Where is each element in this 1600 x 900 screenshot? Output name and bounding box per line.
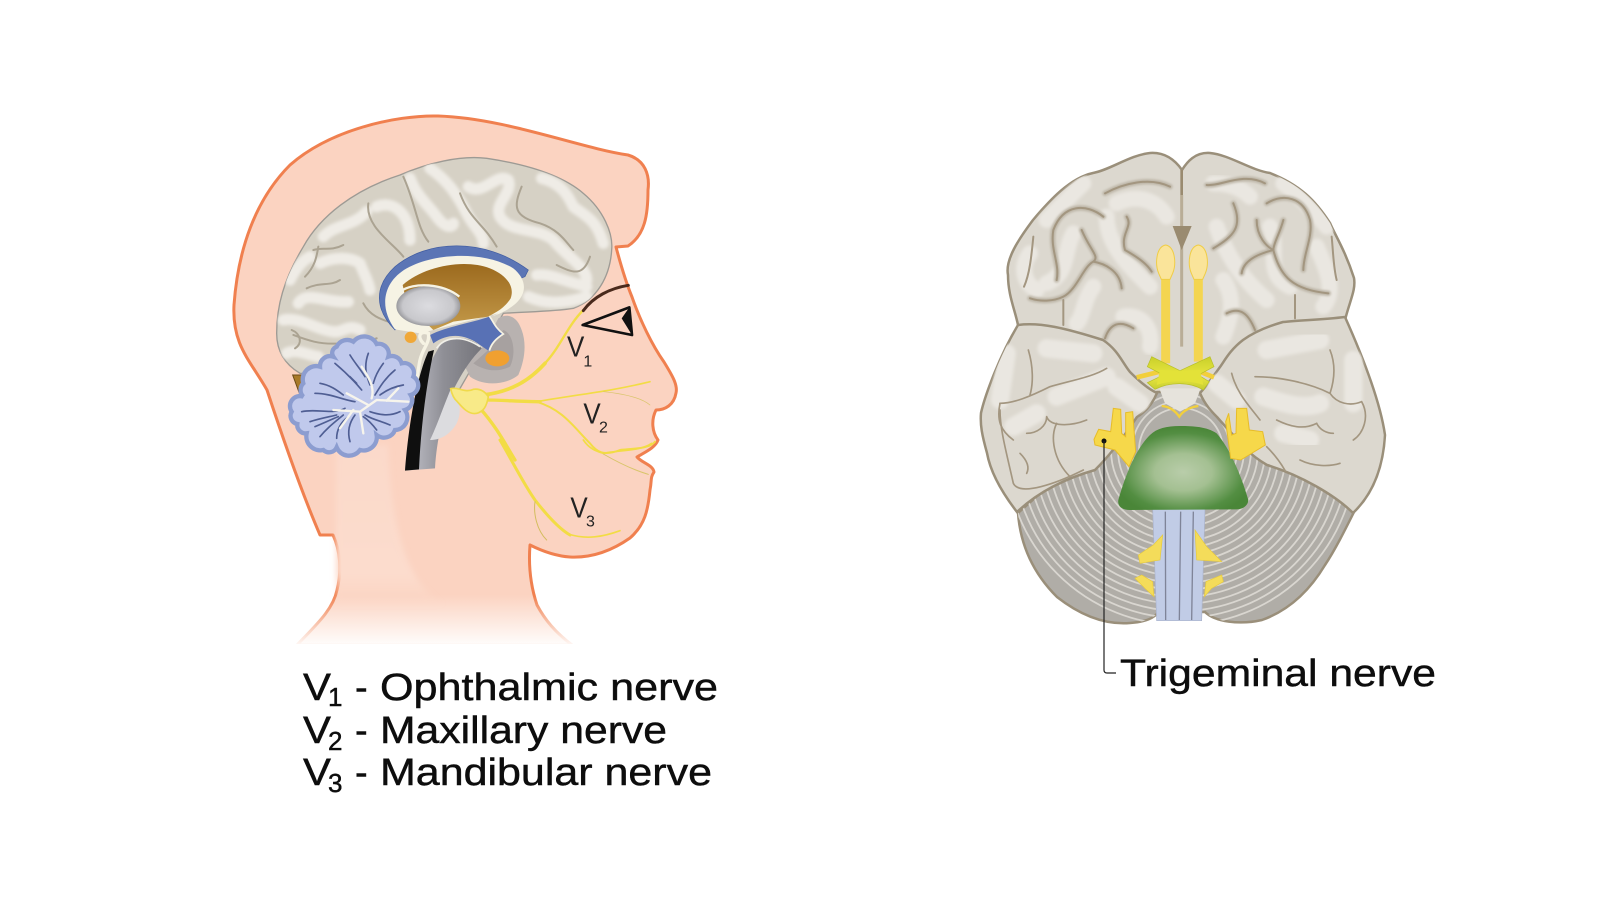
optic nerves orange [1137, 372, 1214, 377]
olfactory bulb left [1157, 245, 1175, 279]
neck highlight [336, 445, 460, 610]
chiasm body [1157, 370, 1203, 385]
olfactory tract right [1185, 273, 1212, 362]
head silhouette [234, 116, 676, 645]
brown tentorium [293, 375, 323, 395]
legend line V1: V [303, 667, 332, 709]
frontal sulci [1024, 179, 1337, 338]
thalamus [396, 286, 460, 326]
cerebellum dark folia [302, 353, 403, 442]
eye [583, 307, 632, 335]
medulla stripes [1165, 512, 1193, 620]
pons [1118, 426, 1248, 510]
label V1: V [567, 332, 584, 364]
legend line V1: - [355, 667, 368, 709]
medulla [1153, 508, 1205, 621]
legend line V2: 2 [328, 726, 342, 756]
fissure wedge [1173, 226, 1192, 250]
legend line V3: 3 [328, 768, 342, 798]
panel: head profile with nerves [234, 116, 676, 652]
brown interior [403, 264, 512, 330]
orange pineal [405, 332, 417, 343]
frontal sulci halo [1030, 179, 1328, 338]
V3 nerve [480, 408, 515, 460]
label V1 subscript: 1 [583, 354, 592, 371]
white edge of ventricle [489, 316, 503, 351]
third ventricle blue [430, 317, 503, 351]
leader dot [1102, 438, 1106, 444]
leader line [1104, 441, 1116, 673]
white aqueduct edge [408, 332, 429, 402]
trigeminal nerve root right [1226, 408, 1265, 460]
brainstem [405, 338, 482, 471]
temporal lower sulci [1000, 410, 1340, 497]
cerebellum folia rings [1018, 392, 1347, 622]
optic chiasm [1147, 357, 1214, 390]
corpus callosum blue [379, 246, 528, 330]
cerebrum gyri light folds [283, 168, 603, 357]
legend line V2: - [355, 710, 368, 752]
legend: V1 V2 V3 nerve names [303, 667, 718, 798]
olfactory bulb right [1189, 245, 1207, 279]
frontal light folds [1024, 183, 1330, 347]
lobe inner shade [473, 330, 513, 370]
panel: inferior view of brain [981, 153, 1385, 625]
cerebrum [277, 158, 612, 400]
legend line V3: - [355, 752, 368, 794]
cerebrum sulci [292, 177, 590, 348]
orange pituitary [485, 350, 509, 366]
grey lobe [463, 316, 525, 383]
V2 nerve [483, 382, 655, 453]
frontal lobes [1008, 153, 1354, 420]
tuber cinereum wedge [1159, 388, 1201, 412]
left temporal lobe [981, 324, 1157, 512]
legend line V2: V [303, 710, 332, 752]
stem white ridge [437, 339, 480, 348]
label V2: V [583, 398, 601, 430]
thalamus top edge [400, 285, 459, 297]
label V3 subscript: 3 [586, 514, 595, 531]
legend line V3 [303, 752, 712, 798]
pons sliver [430, 389, 460, 440]
temporal light folds [1000, 340, 1353, 440]
legend line V2 [303, 710, 667, 756]
legend line V1 [303, 667, 718, 712]
right temporal lobe [1200, 317, 1385, 513]
trigeminal nerve root left [1094, 408, 1136, 467]
lower cranial nerves [1135, 530, 1223, 597]
callout: trigeminal nerve [1102, 438, 1436, 695]
legend line V3: V [303, 752, 332, 794]
hindbrain cerebellum [1018, 392, 1354, 623]
label V3: V [570, 493, 588, 525]
legend line V1: 1 [328, 682, 342, 712]
V1 nerve [483, 310, 583, 395]
small mammillary nerve [1162, 406, 1198, 417]
temporal sulci [999, 350, 1365, 440]
legend line V1: Ophthalmic nerve [380, 667, 718, 709]
callout label: Trigeminal nerve [1120, 653, 1436, 695]
cerebellum outline [290, 336, 418, 456]
iris wedge [622, 307, 632, 335]
trigeminal ganglion [451, 388, 488, 414]
legend line V2: Maxillary nerve [380, 710, 667, 752]
longitudinal fissure [1180, 170, 1183, 195]
cerebellum white tree [333, 367, 408, 433]
black aqueduct [405, 350, 434, 471]
olfactory tract left [1152, 273, 1179, 363]
fissure lower [1180, 195, 1184, 347]
cerebellum [290, 336, 418, 456]
label V2 subscript: 2 [599, 420, 608, 437]
corpus callosum white [385, 256, 524, 333]
neck bottom mask [280, 644, 580, 652]
eyebrow [583, 285, 628, 311]
legend line V3: Mandibular nerve [380, 752, 712, 794]
V3 nerve lower [500, 440, 652, 540]
